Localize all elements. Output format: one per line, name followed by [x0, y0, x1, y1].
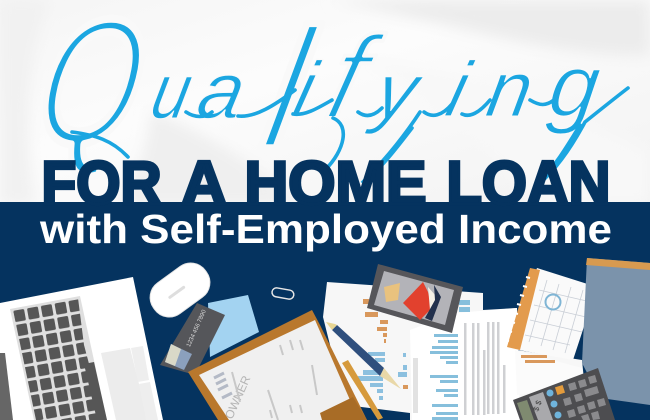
script title: Qualifying: y [363, 48, 430, 135]
script title: Qualifying: u [144, 48, 200, 135]
tablet phone [367, 264, 463, 333]
script title: Qualifying: g [543, 36, 606, 135]
script title: Qualifying: f [316, 13, 392, 144]
blue paper [208, 295, 259, 357]
script title: Qualifying: n [481, 46, 540, 133]
display text: $ $ [531, 399, 544, 413]
paper clip [271, 287, 295, 300]
script flourishes [72, 88, 628, 183]
blue folder [582, 258, 650, 405]
mouse [143, 256, 217, 324]
heading: FOR A HOME LOAN: FOR [42, 149, 162, 217]
script title: Qualifying: i [286, 45, 327, 133]
heading: FOR A HOME LOAN: HOME [244, 149, 426, 217]
script title: Qualifying: a [190, 47, 254, 136]
notebook calendar [505, 268, 597, 360]
script title: Qualifying [25, 0, 606, 185]
calculator [513, 368, 615, 420]
background marble [0, 0, 650, 205]
navy background band [0, 202, 650, 420]
orange bar chart [363, 299, 555, 389]
laptop [0, 277, 163, 420]
report pages [323, 282, 586, 420]
heading: FOR A HOME LOAN: LOAN [446, 149, 610, 217]
gray text lines [464, 322, 506, 415]
heading: FOR A HOME LOAN [42, 149, 610, 217]
card text: 1234 456 7890 [186, 308, 208, 348]
business card [160, 303, 225, 375]
heading: FOR A HOME LOAN: A [182, 149, 226, 217]
subheading: with Self-Employed Income: with Self-Employed Income [39, 206, 612, 252]
clipboard [188, 310, 383, 420]
form title: OWNER [222, 373, 254, 420]
script title: Qualifying: i [439, 45, 480, 133]
blue bar chart [358, 352, 407, 400]
fountain pen [326, 322, 401, 389]
